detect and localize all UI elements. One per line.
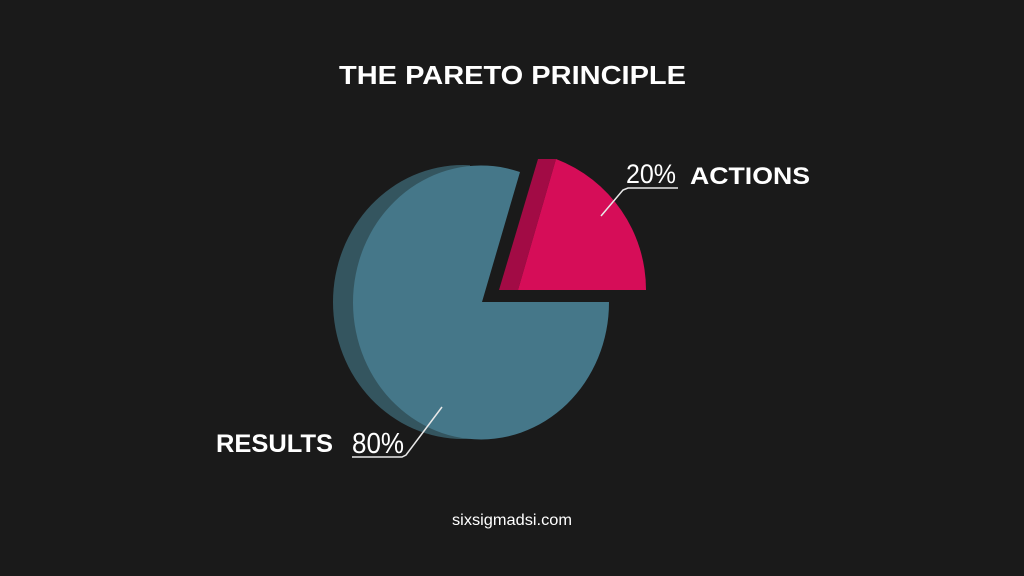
pie chart — [333, 159, 646, 439]
actions slice 20% — [518, 159, 646, 290]
results slice 80% — [353, 165, 609, 439]
callout: 20% actions: ACTIONS — [690, 163, 810, 190]
footer url: sixsigmadsi.com — [452, 512, 572, 529]
actions slice shadow edge — [499, 159, 556, 290]
callout: 20% actions: 20% — [626, 159, 676, 189]
infographic canvas — [218, 66, 809, 528]
callout: 80% results — [216, 407, 442, 460]
callout: 80% results: RESULTS — [216, 430, 333, 458]
callout: 20% actions — [601, 159, 810, 216]
title: THE PARETO PRINCIPLE — [339, 60, 686, 90]
results slice shadow — [333, 165, 470, 439]
callout: 80% results: 80% — [352, 428, 404, 460]
